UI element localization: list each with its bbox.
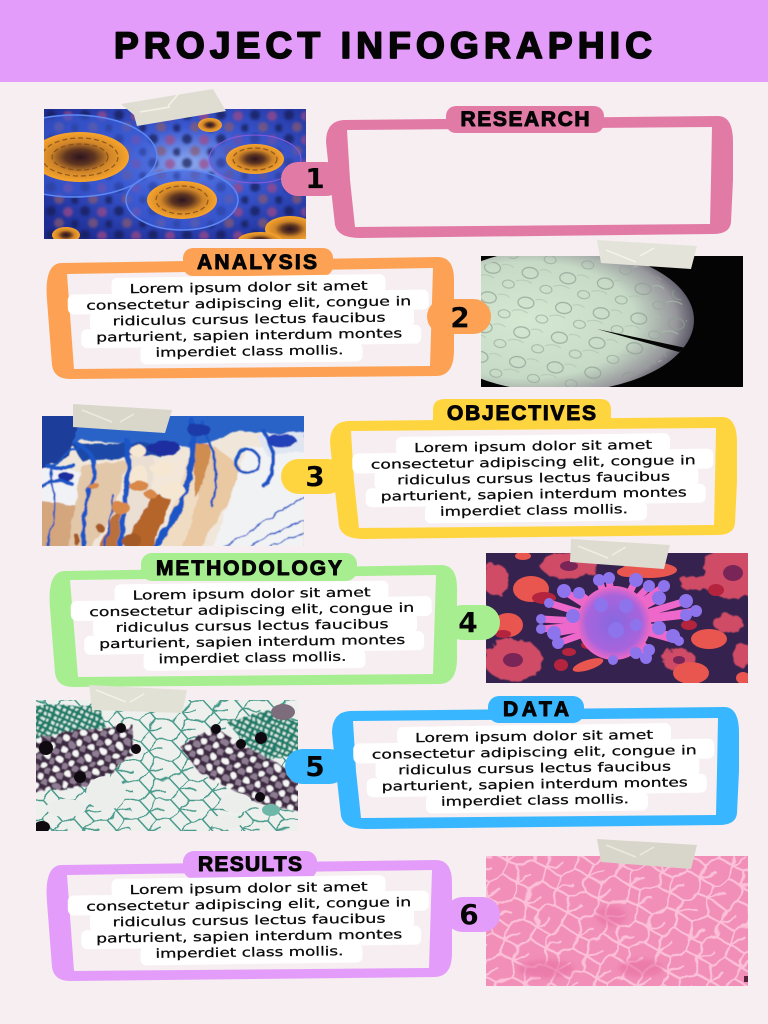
body text: consectetur adipiscing elit, congue in [89,600,414,619]
body text: ridiculus cursus lectus faucibus [398,759,671,777]
body text: imperdiet class mollis. [155,943,344,961]
number badge [427,299,491,334]
panel: methodology [50,553,500,687]
body text [67,273,430,366]
tape 2 [597,240,697,269]
body text: Lorem ipsum dolor sit amet [129,879,368,897]
heading: METHODOLOGY [156,557,342,580]
heading: OBJECTIVES [447,402,596,425]
heading pill [488,696,584,723]
panel: objectives [281,399,737,539]
heading pill [183,851,317,879]
heading pill [433,399,611,425]
tape 5 [89,685,187,713]
tape 6 [597,839,697,869]
number badge [445,605,500,640]
heading pill [446,106,604,133]
panel: results [47,851,500,981]
number: 6 [459,898,479,931]
photo: plant tissue [36,700,298,831]
body text: Lorem ipsum dolor sit amet [414,437,652,455]
title banner [0,0,768,82]
number badge [285,749,347,784]
body text: Lorem ipsum dolor sit amet [415,727,653,745]
body text: consectetur adipiscing elit, congue in [372,742,697,762]
body text [353,722,715,815]
frame [47,860,452,981]
heading: ANALYSIS [197,251,317,274]
body text: ridiculus cursus lectus faucibus [112,911,386,929]
number: 5 [305,750,325,783]
frame [330,417,737,539]
body text: imperdiet class mollis. [440,501,628,519]
body text: imperdiet class mollis. [158,649,347,666]
body text: consectetur adipiscing elit, congue in [86,293,411,313]
heading pill [141,553,357,581]
body text [67,874,430,967]
number: 1 [305,162,325,195]
photo: fluid art [42,416,304,546]
body text: Lorem ipsum dolor sit amet [132,584,371,603]
panel: analysis [47,248,491,379]
number badge [281,162,343,196]
frame [47,257,454,379]
panel: data [285,696,739,829]
photo: blue cells [44,109,306,239]
number: 2 [450,301,470,334]
frame [326,116,733,238]
body text: ridiculus cursus lectus faucibus [115,616,389,635]
body text: ridiculus cursus lectus faucibus [397,469,670,487]
body text [352,432,714,525]
frame [50,565,457,687]
panel: research [281,106,733,238]
photo: virus [486,553,748,683]
heading: RESEARCH [460,108,590,131]
photo: pink cells [486,856,748,986]
number: 4 [458,606,478,639]
heading pill [183,248,333,276]
number badge [281,459,345,494]
tape 3 [73,404,172,433]
body text: parturient, sapien interdum montes [99,632,405,651]
heading: DATA [503,698,569,721]
body text: consectetur adipiscing elit, congue in [371,452,696,472]
photo: microscope view [481,256,743,387]
body text: ridiculus cursus lectus faucibus [112,310,386,328]
body text: consectetur adipiscing elit, congue in [86,894,411,914]
body text: parturient, sapien interdum montes [96,926,402,946]
body text [70,580,433,672]
body text: Lorem ipsum dolor sit amet [129,278,368,296]
tape 4 [570,539,670,569]
body text: parturient, sapien interdum montes [96,325,402,345]
body text: parturient, sapien interdum montes [382,774,688,794]
body text: imperdiet class mollis. [441,791,629,809]
frame [332,707,739,829]
body text: parturient, sapien interdum montes [381,484,687,504]
body text: imperdiet class mollis. [155,342,344,360]
title: PROJECT INFOGRAPHIC [114,25,652,66]
number badge [445,897,500,932]
heading: RESULTS [198,853,302,876]
number: 3 [305,460,325,493]
tape 1 [121,89,226,126]
